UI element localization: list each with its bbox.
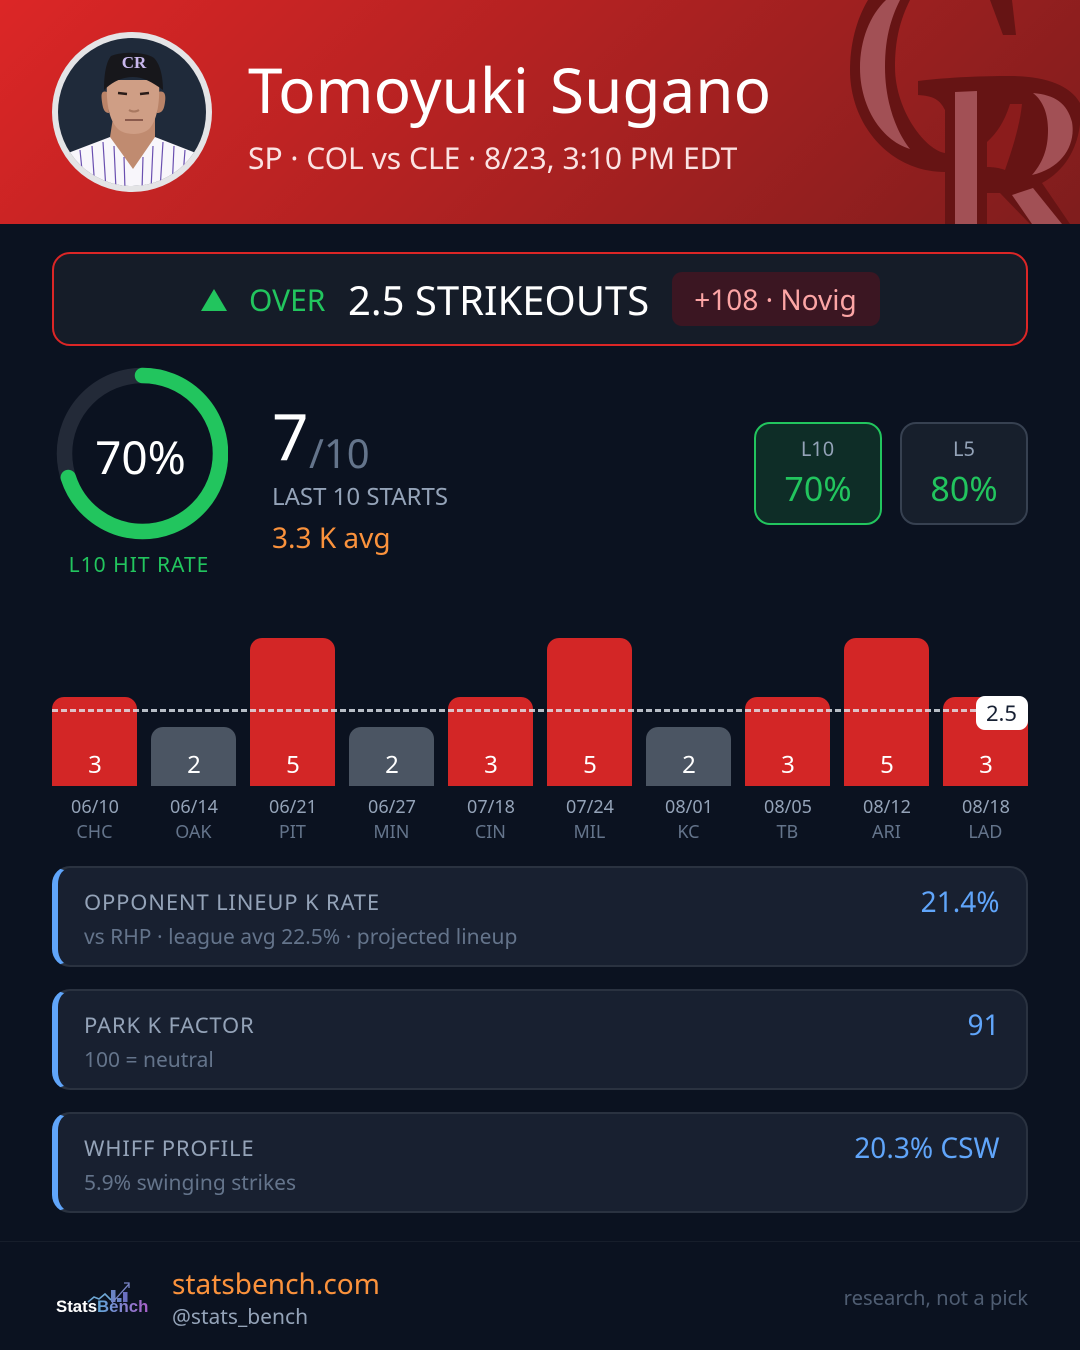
bar 08/12: 5 [880,748,894,781]
sample label: LAST 10 STARTS [272,480,448,513]
label 08/12: ARI [872,820,901,844]
site url: statsbench.com [172,1265,380,1303]
subtitle: SP · COL vs CLE · 8/23, 3:10 PM EDT [248,137,737,178]
label 08/12 [863,795,911,844]
label 06/14: OAK [175,820,212,844]
line label: 2.5 STRIKEOUTS [348,272,649,327]
L10 label: L10 [801,435,834,462]
bar 08/01: 2 [682,748,696,781]
L5 label: L5 [953,435,975,462]
label 06/14: 06/14 [170,795,218,819]
card heading: WHIFF PROFILE [84,1133,254,1163]
bar chart: last 10 starts [52,638,1028,844]
L10 value: 70% [784,465,852,511]
social handle: @stats_bench [172,1303,308,1331]
average: 3.3 K avg [272,519,391,557]
ring chart: hit rate [56,368,228,540]
label 06/27 [368,795,416,844]
card note: vs RHP · league avg 22.5% · projected lineup [84,923,517,951]
bar 07/24: 5 [583,748,597,781]
bar 08/05: 3 [781,748,795,781]
bowl counter [987,104,1022,170]
bar 06/21 [250,638,335,786]
odds chip: +108 · Novig [694,281,857,319]
label 06/10: CHC [76,820,112,844]
bar 06/10 [52,697,137,786]
label 06/10: 06/10 [71,795,119,819]
hits: 7 [272,392,309,479]
card heading: OPPONENT LINEUP K RATE [84,887,380,917]
disclaimer: research, not a pick [844,1283,1028,1311]
label 06/21: 06/21 [269,795,317,819]
footer [0,1241,1080,1350]
bar 06/27: 2 [385,748,399,781]
icon: team logo watermark [850,0,1080,224]
label 06/14 [170,795,218,844]
bar 06/21: 5 [286,748,300,781]
bar 07/24 [547,638,632,786]
panel: opponent lineup k rate [52,866,1028,967]
stat box: L10 [754,422,882,525]
title: Tomoyuki Sugano [248,48,771,132]
bar 08/18: 3 [979,748,993,781]
label 07/24: 07/24 [566,795,614,819]
icon: StatsBench logo [56,1282,148,1316]
header band [0,0,1080,224]
card note: 100 = neutral [84,1046,214,1074]
label 06/27: 06/27 [368,795,416,819]
label 07/24 [566,795,614,844]
player headshot: CR [122,53,147,72]
label 08/01 [665,795,713,844]
panel: park k factor [52,989,1028,1090]
bar 07/18: 3 [484,748,498,781]
card note: 5.9% swinging strikes [84,1169,296,1197]
bar 08/01 [646,727,731,786]
label 06/27: MIN [373,820,409,844]
bar 08/12 [844,638,929,786]
bar 06/10: 3 [88,748,102,781]
bar 08/05 [745,697,830,786]
logo wordmark: StatsBench [56,1297,148,1316]
out of ten: /10 [309,425,370,480]
threshold label [976,696,1028,730]
odds chip [672,272,880,326]
hit count [272,392,370,480]
label 08/18 [962,795,1010,844]
threshold label: 2.5 [986,698,1017,728]
label 07/18 [467,795,515,844]
card value: 21.4% [921,883,1000,921]
label 08/12: 08/12 [863,795,911,819]
label 08/05: TB [777,820,798,844]
label 07/18: 07/18 [467,795,515,819]
card heading: PARK K FACTOR [84,1010,255,1040]
bar 07/18 [448,697,533,786]
card value: 20.3% CSW [854,1129,1000,1167]
label 08/18: 08/18 [962,795,1010,819]
icon: up triangle [201,289,227,311]
label 06/21 [269,795,317,844]
L5 value: 80% [930,465,998,511]
label 06/21: PIT [279,820,306,844]
player headshot [52,32,212,192]
over label: OVER [249,279,325,320]
stat box: L5 [900,422,1028,525]
label 08/01: 08/01 [665,795,713,819]
ring caption: L10 HIT RATE [69,551,209,579]
label 08/05 [764,795,812,844]
label 06/10 [71,795,119,844]
label 08/01: KC [677,820,699,844]
threshold line [52,709,976,712]
label 08/18: LAD [968,820,1002,844]
label 07/18: CIN [475,820,506,844]
bar 06/14 [151,727,236,786]
ring value: 70% [95,426,186,488]
bar 06/14: 2 [187,748,201,781]
bar 08/18 [943,697,1028,786]
label 07/24: MIL [573,820,605,844]
label 08/05: 08/05 [764,795,812,819]
panel: whiff profile [52,1112,1028,1213]
panel: pick banner [52,252,1028,346]
card value: 91 [967,1006,1000,1044]
bar 06/27 [349,727,434,786]
